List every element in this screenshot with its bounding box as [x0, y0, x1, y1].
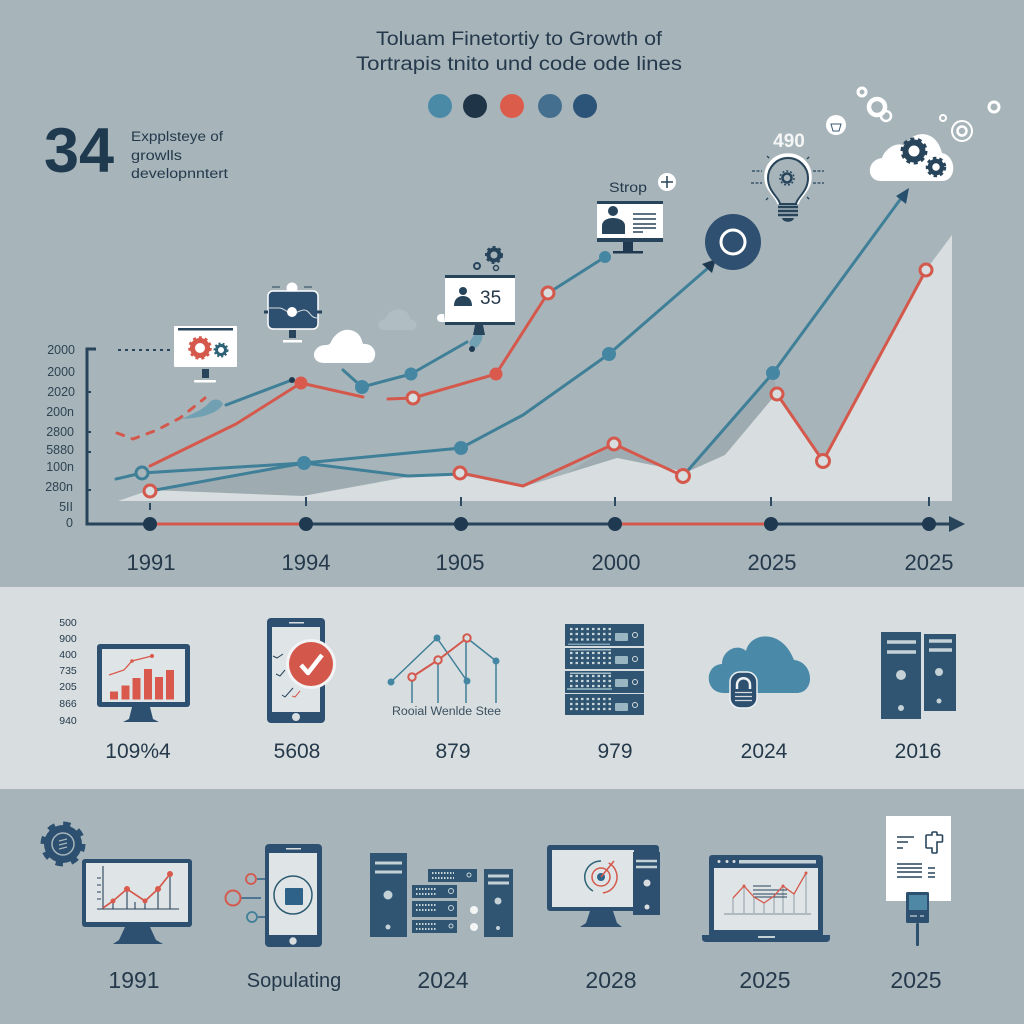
icon: monitor with person and number 35: 35	[480, 288, 501, 309]
icon: monitor with bar chart	[97, 644, 190, 722]
side value list: 900	[59, 633, 77, 645]
middle row labels: 979	[597, 740, 633, 763]
middle row labels: 5608	[274, 740, 320, 763]
y axis labels: 200n	[46, 405, 74, 419]
bottom row labels: 1991	[108, 967, 160, 993]
icon: small badges and rings	[826, 88, 999, 141]
icon: server towers	[881, 632, 956, 719]
teal series lines	[116, 188, 909, 491]
year labels: 2025	[905, 550, 953, 575]
icon: desktop with target	[547, 845, 660, 927]
icon: server cluster	[370, 853, 513, 937]
icon: light bulb with 490: 490	[773, 131, 805, 152]
icon: monitor with line chart	[82, 859, 192, 944]
icon: server rack	[565, 624, 644, 715]
title: Toluam Finetortiy to Growth of	[376, 29, 663, 50]
label: Strop: Strop	[609, 179, 647, 195]
year labels: 2025	[748, 550, 796, 575]
year labels: 1905	[436, 550, 484, 575]
middle row labels: 879	[435, 740, 471, 763]
year labels	[127, 550, 953, 575]
icon: document with device	[886, 816, 951, 946]
palette dots	[428, 94, 597, 118]
side value list: 500	[59, 617, 77, 629]
y axis labels: 5II	[59, 500, 73, 514]
bottom row labels: 2025	[739, 967, 791, 993]
y axis labels: 280n	[45, 480, 73, 494]
stat description: developnntert	[131, 166, 228, 181]
chart: code growth timeline	[45, 188, 965, 575]
side value list: 866	[59, 698, 77, 710]
year labels: 1991	[127, 550, 175, 575]
middle row labels: 2016	[895, 740, 941, 763]
stat description	[131, 129, 228, 181]
y axis labels: 2020	[47, 385, 75, 399]
icon: faint cloud	[378, 309, 417, 330]
side value list: 400	[59, 649, 77, 661]
icon: light bulb with 490	[751, 131, 824, 222]
icon: monitor with gears	[174, 326, 237, 382]
y axis labels: 5880	[46, 443, 74, 457]
side value list: 205	[59, 681, 77, 693]
side value list: 735	[59, 665, 77, 677]
y axis labels: 2800	[46, 425, 74, 439]
bottom row labels: Sopulating	[247, 970, 341, 992]
icon: monitor with person and number 35	[437, 247, 515, 335]
y axis labels: 2000	[47, 365, 75, 379]
icon: phone with check badge	[267, 618, 336, 723]
band: middle icon row background	[0, 587, 1024, 789]
stat description: growlls	[131, 148, 182, 163]
side value list: 940	[59, 715, 77, 727]
y axis labels	[45, 343, 75, 530]
bottom row labels: 2028	[585, 967, 637, 993]
icon: plus badge	[658, 173, 676, 191]
year labels: 1994	[282, 550, 330, 575]
stat description: Expplsteye of	[131, 129, 223, 144]
side value list	[59, 617, 77, 727]
middle row labels	[105, 740, 941, 763]
title	[356, 29, 682, 75]
y axis labels: 100n	[46, 460, 74, 474]
icon: mini line chart with caption: Rooial Wenlde Stee	[392, 706, 501, 718]
icon: dark monitor with curve	[264, 282, 322, 342]
icon: target disc	[705, 214, 761, 270]
y axis labels: 0	[66, 516, 73, 530]
red series lines	[117, 264, 932, 497]
year labels: 2000	[592, 550, 640, 575]
icon: white cloud	[314, 330, 375, 363]
middle row labels: 109%4	[105, 740, 171, 763]
bottom row labels: 2025	[890, 967, 942, 993]
y axis labels: 2000	[47, 343, 75, 357]
icon: monitor with profile	[597, 201, 663, 254]
area under series	[118, 235, 952, 501]
title: Tortrapis tnito und code ode lines	[356, 54, 682, 75]
icon: mini line chart with caption	[388, 634, 501, 718]
icon: gear	[42, 824, 84, 864]
big stat 34: 34	[44, 116, 114, 186]
icon: cloud with padlock	[709, 636, 810, 708]
icon: cloud with gears	[870, 134, 953, 181]
bottom row labels: 2024	[417, 967, 469, 993]
bottom row labels	[108, 967, 942, 993]
middle row labels: 2024	[741, 740, 788, 763]
axes	[87, 349, 965, 532]
icon: laptop with chart	[702, 855, 830, 942]
icon: phone with app connectors	[226, 844, 322, 947]
